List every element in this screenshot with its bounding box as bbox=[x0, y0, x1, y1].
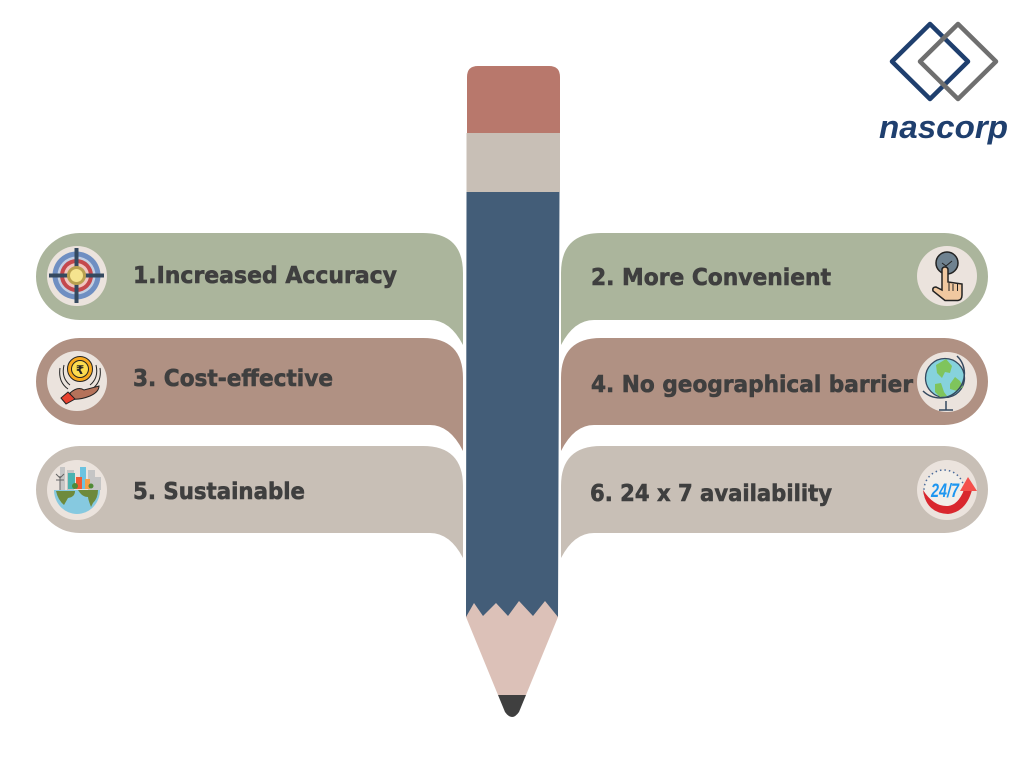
icon: target bbox=[47, 246, 107, 306]
panel: 2 more convenient bbox=[561, 233, 988, 345]
panel: 3 cost-effective bbox=[36, 338, 463, 451]
label: 6. 24 x 7 availability bbox=[590, 481, 832, 507]
pencil ferrule bbox=[466, 133, 560, 192]
icon: city on globe bbox=[47, 460, 107, 520]
pencil eraser bbox=[467, 66, 560, 133]
label: 1.Increased Accuracy bbox=[133, 263, 397, 289]
icon: 24/7 clock bbox=[917, 460, 977, 520]
pencil body bbox=[466, 192, 560, 617]
pencil wood tip bbox=[466, 598, 558, 695]
icon: globe bbox=[917, 352, 977, 412]
label: 3. Cost-effective bbox=[133, 366, 333, 392]
icon: coin on hand: ₹ bbox=[76, 363, 84, 377]
label: 2. More Convenient bbox=[591, 265, 831, 291]
panel: 1 increased accuracy bbox=[36, 233, 463, 345]
pencil bbox=[466, 66, 560, 717]
icon: pointing hand bbox=[917, 246, 977, 306]
logo: nascorp bbox=[879, 24, 1008, 145]
panel: 5 sustainable bbox=[36, 446, 463, 558]
logo: nascorp: nascorp bbox=[879, 109, 1008, 145]
panel: 4 no geographical barrier bbox=[561, 338, 988, 451]
label: 5. Sustainable bbox=[133, 479, 305, 505]
pencil lead bbox=[498, 695, 526, 717]
panel: 6 24 x 7 availability bbox=[561, 446, 988, 558]
icon: coin on hand bbox=[47, 351, 107, 411]
label: 4. No geographical barrier bbox=[591, 372, 914, 398]
icon: 24/7 clock: 24/7 bbox=[930, 481, 960, 502]
